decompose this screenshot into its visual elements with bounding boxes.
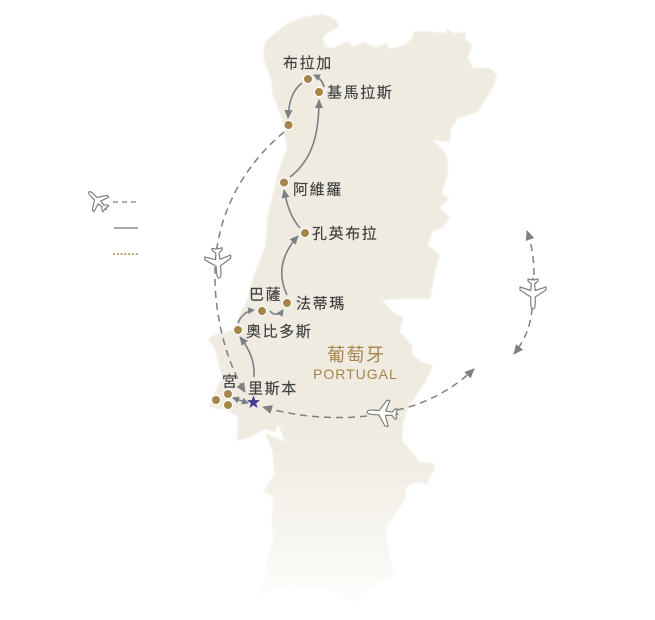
city labels: 奧比多斯 — [246, 322, 312, 340]
route: dashed flight arrows — [215, 132, 534, 418]
icon: plane on left route — [204, 246, 232, 279]
map: Portugal landmass — [208, 14, 497, 603]
legend: dotted line — [113, 253, 138, 255]
city labels: 布拉加 — [283, 55, 333, 72]
country label: PORTUGAL — [313, 366, 398, 382]
country label — [313, 345, 398, 382]
city labels: 宮 — [222, 374, 239, 390]
city labels: 巴薩 — [249, 286, 282, 304]
icon: Lisbon star — [247, 396, 260, 408]
legend — [82, 185, 138, 254]
route: solid ground arrows — [233, 75, 324, 403]
city labels: 法蒂瑪 — [296, 296, 346, 312]
legend: dashed flight line — [113, 201, 138, 203]
country label: 葡萄牙 — [327, 345, 386, 365]
city labels: 基馬拉斯 — [327, 84, 393, 102]
icon: legend plane — [82, 185, 114, 217]
icon: plane on arrival route — [366, 399, 399, 427]
icon: plane on right route — [520, 278, 546, 309]
city labels — [222, 55, 393, 398]
legend: solid ground line — [114, 227, 138, 229]
city labels: 里斯本 — [248, 380, 298, 398]
city labels: 孔英布拉 — [312, 226, 378, 242]
city markers — [211, 74, 324, 410]
city labels: 阿維羅 — [293, 182, 343, 198]
